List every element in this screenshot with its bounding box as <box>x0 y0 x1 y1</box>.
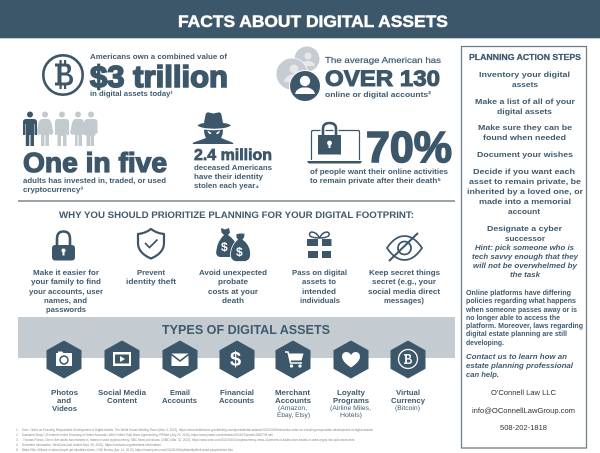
icon: dollar hexagon: $ <box>230 349 241 371</box>
icon: gift <box>307 232 332 258</box>
text: adults invested: cryptocurrency³ <box>23 185 83 194</box>
label: and <box>57 396 72 405</box>
text: social media direct <box>368 287 440 296</box>
step: decide: Decide if you want each <box>473 167 575 176</box>
text: people want: of people want their online activities <box>310 167 448 176</box>
icon: cart hexagon <box>276 341 310 378</box>
text: your accounts, user <box>29 287 103 296</box>
label: Videos <box>52 404 77 413</box>
stat: over 130: OVER 130 <box>325 66 440 91</box>
text: Avoid unexpected <box>199 268 267 277</box>
step: cyber successor: Designate a cyber <box>487 224 562 233</box>
footnotes: 2. <box>16 433 19 437</box>
stat: 2.4 million: 2.4 million <box>194 147 272 164</box>
label: Financial <box>220 388 254 397</box>
label: Currency <box>391 396 426 405</box>
footnotes: Decedent Information, NextCare (last visited Sept. 26, 2022), https://nextcare.org/decedent-information/. <box>22 443 162 447</box>
label: Ebay, Etsy) <box>277 413 310 419</box>
text: deceased americans <box>194 163 272 190</box>
text: probate <box>218 277 248 286</box>
step: inventory <box>479 70 570 89</box>
contact: phone: 508-202-1818 <box>500 423 547 432</box>
text: adults invested: adults has invested in, traded, or used <box>23 176 166 185</box>
text <box>199 268 267 305</box>
icon: camera hexagon <box>47 341 81 378</box>
step: make sure found: found when needed <box>483 133 566 142</box>
icon: crossed eye <box>387 233 422 261</box>
text: contact us: Contact us to learn how an <box>466 352 567 361</box>
icon: padlock <box>52 232 75 260</box>
label <box>51 388 78 413</box>
reason: probate costs <box>199 228 267 305</box>
label: (Airline Miles, <box>330 406 371 412</box>
text: online platforms: policies regarding what happens <box>466 296 576 305</box>
label: Content <box>107 396 138 405</box>
label: Loyalty <box>337 388 366 397</box>
label: Accounts <box>162 396 197 405</box>
stat: seventy percent: 70% <box>366 123 452 172</box>
step: decide <box>467 167 583 216</box>
heading: TYPES OF DIGITAL ASSETS <box>162 323 330 337</box>
text: passwords <box>46 305 86 314</box>
label: Virtual <box>396 388 420 397</box>
text: online accounts: online or digital accounts² <box>325 90 432 99</box>
label: Hotels) <box>340 413 362 419</box>
step: cyber successor: the task <box>510 270 541 279</box>
contact: email: info@OConnellLawGroup.com <box>472 406 575 415</box>
icon: laptop with lock <box>307 123 362 164</box>
icon: spy <box>192 112 234 144</box>
step: decide: inherited by a loved one, or <box>467 187 583 196</box>
step: make a list: Make a list of all of your <box>475 97 575 106</box>
label: Email <box>170 388 190 397</box>
text: in digital assets: in digital assets today¹ <box>90 89 173 98</box>
header banner <box>0 0 600 39</box>
step: cyber successor: successor <box>505 234 545 243</box>
text: contact us: can help. <box>466 370 499 379</box>
section: types of digital assets <box>18 317 455 419</box>
icon: money bags: $ <box>236 245 243 259</box>
icon: bitcoin hexagon <box>391 341 425 378</box>
panel: planning action steps <box>462 46 586 448</box>
stat: one in five: One in five <box>23 147 167 178</box>
text: Pass on digital <box>292 268 347 277</box>
step: decide: made into a memorial <box>479 197 571 206</box>
footnotes <box>16 428 373 452</box>
reason: pass on assets <box>292 232 347 305</box>
step: cyber successor: tech savvy enough that they <box>472 252 579 261</box>
asset: photos and videos <box>47 341 81 413</box>
text: names, and <box>44 296 87 305</box>
text: secret (e.g., your <box>372 277 436 286</box>
text: deceased americans: stolen each year₄ <box>194 181 259 190</box>
step: cyber successor <box>472 224 579 279</box>
text: online platforms: when someone passes away or is <box>465 305 577 314</box>
label: Social Media <box>98 388 147 397</box>
asset: email accounts <box>162 341 197 405</box>
text: deceased americans: deceased Americans <box>194 163 272 172</box>
text: contact us <box>466 352 574 379</box>
icon: heart hexagon <box>334 341 368 378</box>
footnotes: 3. <box>16 438 19 442</box>
text: messages) <box>384 296 424 305</box>
step: inventory: assets <box>512 80 538 89</box>
reason: keep secrets <box>368 233 440 305</box>
label <box>391 388 426 412</box>
footnotes: 5. <box>16 448 19 452</box>
footnotes: Blake Ellis, Millions of dead people get identities stolen, CNN Money (Apr. 14, 2012), https://money.cnn.com/2012/04/04/pf/identity/theft-dead-people/index.htm <box>22 448 233 452</box>
icon: envelope hexagon <box>163 341 197 378</box>
asset: social media content <box>98 341 147 405</box>
step: cyber successor: Hint: pick someone who is <box>475 243 574 252</box>
fact: over 130 accounts <box>276 46 441 102</box>
label <box>162 388 197 405</box>
icon: shield <box>138 229 164 258</box>
asset: merchant accounts <box>275 341 311 419</box>
icon: bitcoin <box>43 55 83 95</box>
footnotes: 4. <box>16 443 19 447</box>
text: people want <box>310 167 448 185</box>
text: online platforms: platform. Moreover, laws regarding <box>466 321 583 330</box>
label <box>219 388 254 405</box>
step: decide: asset to remain private, be <box>469 177 581 186</box>
icon: film hexagon <box>105 341 139 378</box>
text: Prevent <box>137 268 165 277</box>
label: Merchant <box>275 388 311 397</box>
text <box>126 268 177 286</box>
label <box>330 388 371 419</box>
text <box>29 268 103 314</box>
text: online platforms: developing. <box>466 338 504 347</box>
title: FACTS ABOUT DIGITAL ASSETS <box>178 12 448 31</box>
text: people want: to remain private after their death⁵ <box>310 176 441 185</box>
step: document wishes: Document your wishes <box>477 150 573 159</box>
text: Make it easier for <box>33 268 99 277</box>
label: (Amazon, <box>278 406 307 412</box>
text: adults invested <box>23 176 166 194</box>
asset: loyalty programs <box>330 341 371 419</box>
text: deceased americans: have their identity <box>194 172 264 181</box>
reason: find accounts <box>29 232 103 314</box>
text: average american: The average American has <box>325 55 441 65</box>
text: death <box>222 296 244 305</box>
footnotes: 1. <box>16 428 19 432</box>
text: online platforms: no longer able to access the <box>466 313 560 322</box>
text: online platforms: Online platforms have differing <box>466 288 571 297</box>
footnotes: Dashlane Study: US Internet Users Drowning in Online Accounts--With Further Tidal Wave Approaching, PRWeb (July 23, 2015), https://www.prweb.com/releases/2015/07/prweb12860739.htm <box>22 433 273 437</box>
footnotes: Exec. Order on Ensuring Responsible Development of Digital Assets, The White House Briefing Room (Mar. 9, 2022), https://www.whitehouse.gov/briefing-room/presidential-actions/2022/03/09/executive-order-on-ensuring-responsible-development-of-digital-assets/ <box>22 428 373 432</box>
text: Keep secret things <box>369 268 440 277</box>
text <box>368 268 440 305</box>
label: Programs <box>333 396 369 405</box>
step: inventory: Inventory your digital <box>479 70 570 79</box>
text <box>292 268 347 305</box>
text: costs at your <box>208 287 258 296</box>
stat: three trillion: $3 trillion <box>90 59 228 94</box>
icon: money bags: $ <box>221 240 228 254</box>
panel heading: PLANNING ACTION STEPS <box>469 53 582 62</box>
heading: WHY YOU SHOULD PRIORITIZE PLANNING FOR YOUR DIGITAL FOOTPRINT: <box>59 210 414 221</box>
step: make sure found: Make sure they can be <box>478 123 572 132</box>
text: your family to find <box>31 277 101 286</box>
label <box>275 388 311 419</box>
icon: five people <box>23 112 98 146</box>
section: why prioritize planning <box>29 210 440 314</box>
label: Photos <box>51 388 78 397</box>
fact: seventy percent <box>307 123 452 185</box>
text: americans own: Americans own a combined value of <box>90 52 227 61</box>
fact: one in five <box>23 112 167 194</box>
step: cyber successor: will not be overwhelmed by <box>473 261 578 270</box>
text: contact us: estate planning professional <box>466 361 574 370</box>
label <box>98 388 147 405</box>
text: individuals <box>300 296 340 305</box>
icon: money bags <box>216 228 251 262</box>
step: make a list: digital assets <box>497 107 552 116</box>
asset: financial accounts <box>219 341 254 405</box>
fact: three trillion <box>43 52 228 98</box>
step: make a list <box>475 97 575 116</box>
label: (Bitcoin) <box>395 406 420 412</box>
label: Accounts <box>219 396 254 405</box>
reason: prevent theft <box>126 229 177 286</box>
footnotes: Thomas Franck, One in five adults has invested in, traded or used cryptocurrency, NBC News poll shows, CNBC (Mar. 31, 2022), https://www.cnbc.com/2022/03/31/cryptocurrency-news-21percent-of-adults-have-traded-or-used-crypto-nbc-poll-shows.html. <box>23 438 355 442</box>
text: online platforms <box>465 288 583 347</box>
step: make sure found <box>478 123 572 142</box>
text: intended <box>302 287 336 296</box>
label: Accounts <box>275 396 311 405</box>
contact: firm name: O'Connell Law LLC <box>491 388 556 397</box>
text: identity theft <box>126 277 177 286</box>
text: assets to <box>302 277 336 286</box>
icon: account circles <box>276 46 320 102</box>
text: online platforms: digital estate planning are still <box>466 329 567 338</box>
asset: virtual currency <box>391 341 426 412</box>
fact: identity theft <box>192 112 272 190</box>
step: decide: account <box>508 207 541 216</box>
